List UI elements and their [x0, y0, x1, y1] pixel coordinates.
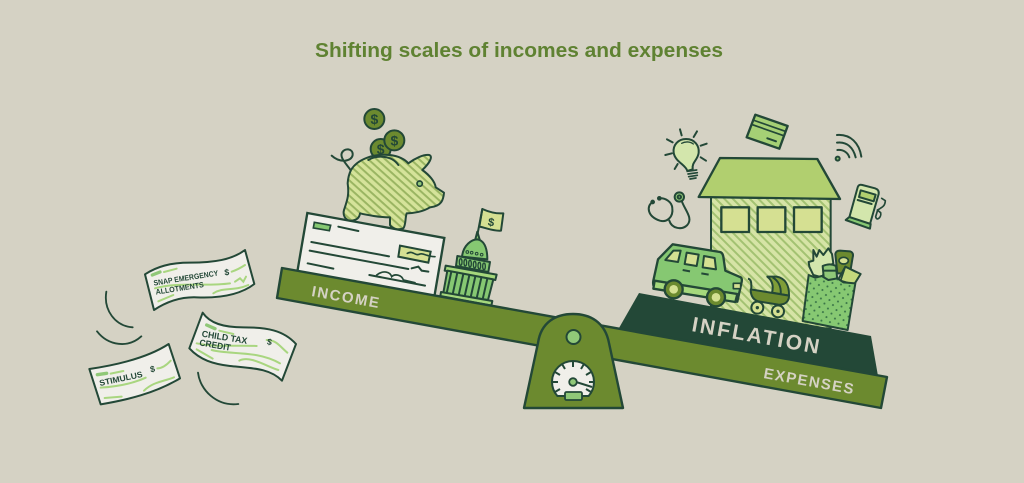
check: child tax credit: CREDIT [199, 337, 232, 353]
icon: credit card [747, 115, 788, 149]
piggy bank: $ [390, 132, 398, 148]
check: child tax credit: CHILD TAX [201, 329, 248, 346]
icon: grocery bag [803, 248, 861, 330]
check: stimulus: STIMULUS [98, 369, 144, 388]
house roof [699, 158, 840, 199]
capitol building: $ [487, 216, 496, 230]
coin [371, 139, 391, 159]
check: snap emergency allotments [145, 250, 254, 310]
icon: stroller [748, 277, 789, 317]
check: stimulus [89, 344, 180, 404]
piggy bank: $ [370, 111, 378, 127]
balance beam [277, 268, 887, 408]
check: snap emergency allotments: $ [224, 267, 230, 277]
pig body [344, 155, 444, 229]
check: snap emergency allotments: SNAP EMERGENCY [153, 269, 219, 288]
icon: car [653, 244, 742, 306]
coin [364, 109, 384, 129]
icon: stethoscope [649, 192, 689, 228]
icon: wifi [836, 135, 861, 161]
expenses label: EXPENSES [762, 365, 855, 398]
check: child tax credit: $ [266, 336, 273, 347]
fulcrum [524, 314, 623, 408]
pig tail [332, 149, 353, 171]
icon: gas pump [846, 185, 885, 229]
house [699, 158, 840, 328]
coin [384, 130, 404, 150]
check: stimulus: $ [149, 364, 156, 374]
fulcrum pivot [566, 330, 580, 344]
income label: INCOME [310, 283, 380, 312]
icon: light bulb [665, 129, 707, 179]
main check [297, 213, 444, 297]
piggy bank [332, 109, 444, 229]
house windows [721, 207, 822, 232]
title: Shifting scales of incomes and expenses [315, 40, 723, 62]
check: child tax credit [189, 313, 296, 381]
motion lines [97, 292, 238, 404]
flag [479, 209, 503, 231]
car windows [665, 251, 716, 269]
groceries [809, 248, 833, 277]
car wheels [665, 280, 683, 298]
inflation block [619, 293, 878, 376]
piggy bank: $ [377, 141, 385, 157]
capitol building [440, 209, 503, 306]
check: snap emergency allotments: ALLOTMENTS [155, 280, 204, 297]
inflation label: INFLATION [690, 313, 821, 359]
gauge [552, 361, 594, 400]
